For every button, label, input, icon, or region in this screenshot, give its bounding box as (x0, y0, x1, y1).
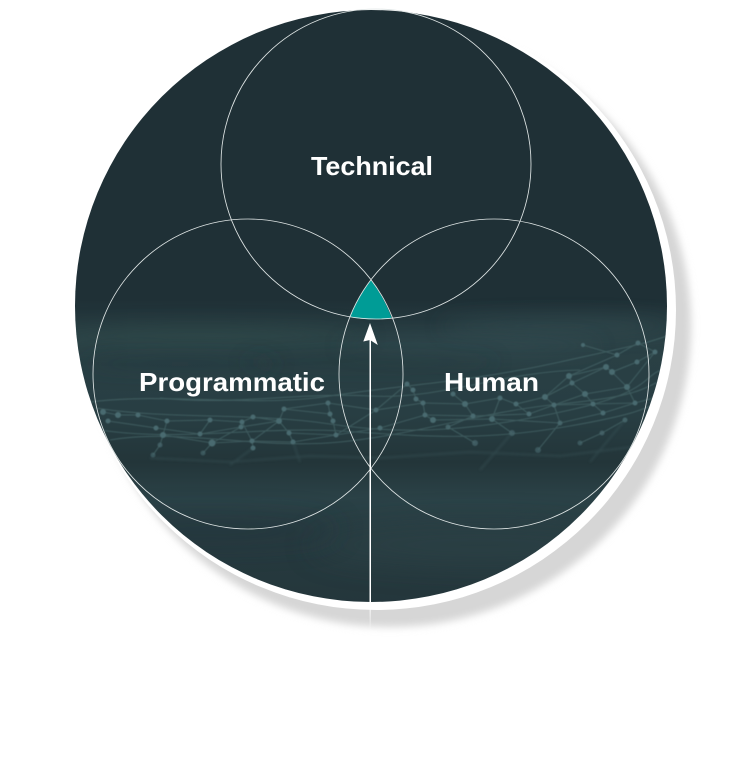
soft lower mesh (229, 448, 603, 464)
label: Human: Human (444, 367, 539, 397)
arrow pointing to the intersection (363, 323, 378, 633)
label: Technical: Technical (311, 151, 433, 181)
teal intersection segment (350, 280, 392, 319)
circle: Technical (221, 9, 531, 319)
circle: Human (339, 219, 649, 529)
dark background disc with network image (75, 10, 667, 602)
circle: Programmatic (93, 219, 403, 529)
white disc ring (76, 10, 676, 610)
drop shadow (89, 25, 691, 627)
label: Programmatic: Programmatic (139, 367, 325, 397)
network mesh (90, 335, 670, 458)
